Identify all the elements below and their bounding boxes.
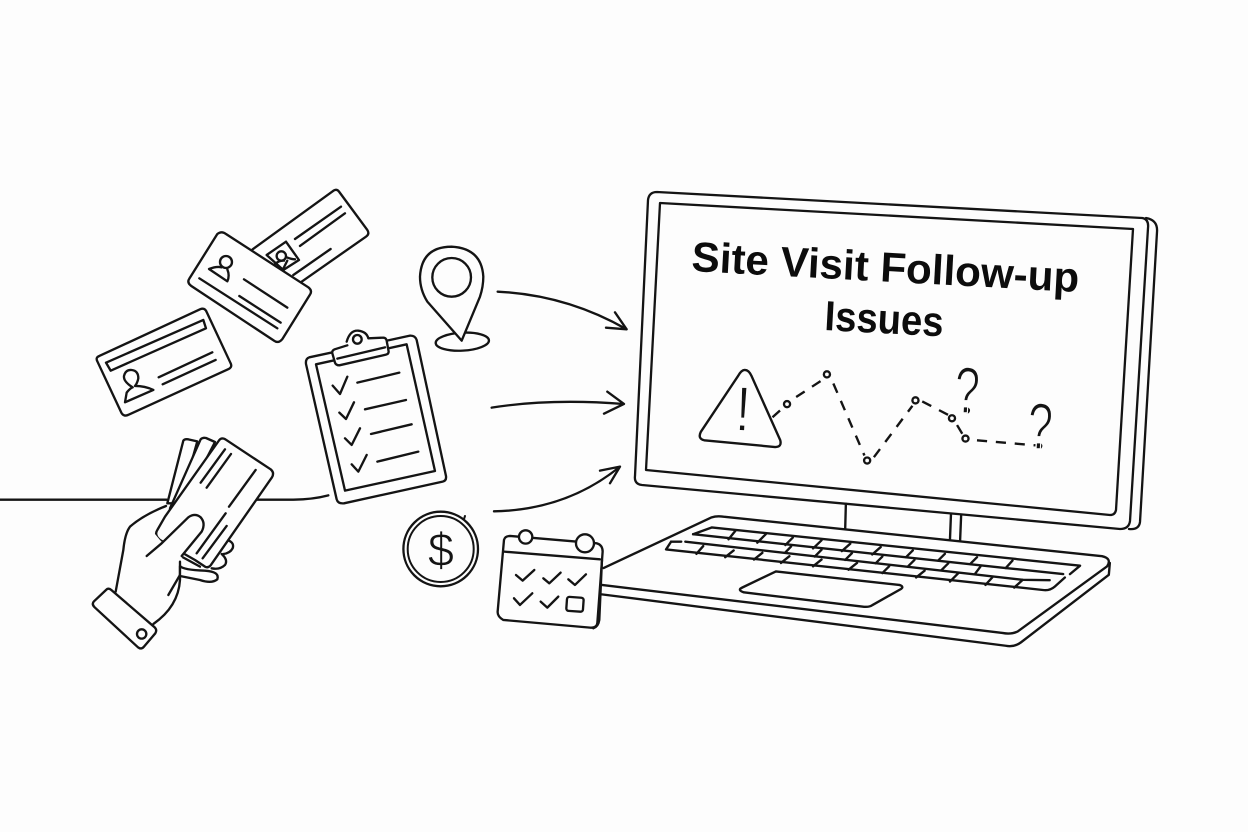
icon: laptop base and keyboard <box>602 516 1110 646</box>
icon: dollar coin: $ <box>428 523 454 576</box>
trackpad <box>740 571 902 607</box>
fanned cards <box>156 438 273 567</box>
icon: dollar coin <box>403 512 478 586</box>
arrow: pin to monitor <box>498 292 627 329</box>
icon: warning triangle: ! <box>732 373 754 445</box>
monitor frame <box>635 192 1157 529</box>
icon: monitor stand <box>845 504 961 540</box>
keys <box>666 527 1080 590</box>
icon: hand holding cards <box>93 438 273 648</box>
title <box>691 233 1080 345</box>
hand palm and fingers <box>116 506 233 624</box>
arrow: clipboard to monitor <box>492 392 624 414</box>
shirt cuff <box>93 589 156 648</box>
icon: location pin <box>420 247 489 352</box>
question mark 1: ? <box>953 353 982 428</box>
question mark 2: ? <box>1026 389 1055 464</box>
icon: calendar <box>498 530 603 628</box>
icon: back ID card <box>253 190 368 282</box>
thumb <box>147 515 204 560</box>
title: Site Visit Follow-up <box>691 233 1080 301</box>
icon: clipboard checklist <box>306 331 446 503</box>
arrow: coin to monitor <box>494 467 620 511</box>
dashed trend line <box>772 371 1041 464</box>
icon: left ID card <box>97 309 231 416</box>
flow line running behind hand to clipboard <box>0 495 328 500</box>
icon: warning triangle <box>700 370 781 447</box>
icon: middle ID card <box>188 232 311 342</box>
title: Issues <box>824 292 945 345</box>
